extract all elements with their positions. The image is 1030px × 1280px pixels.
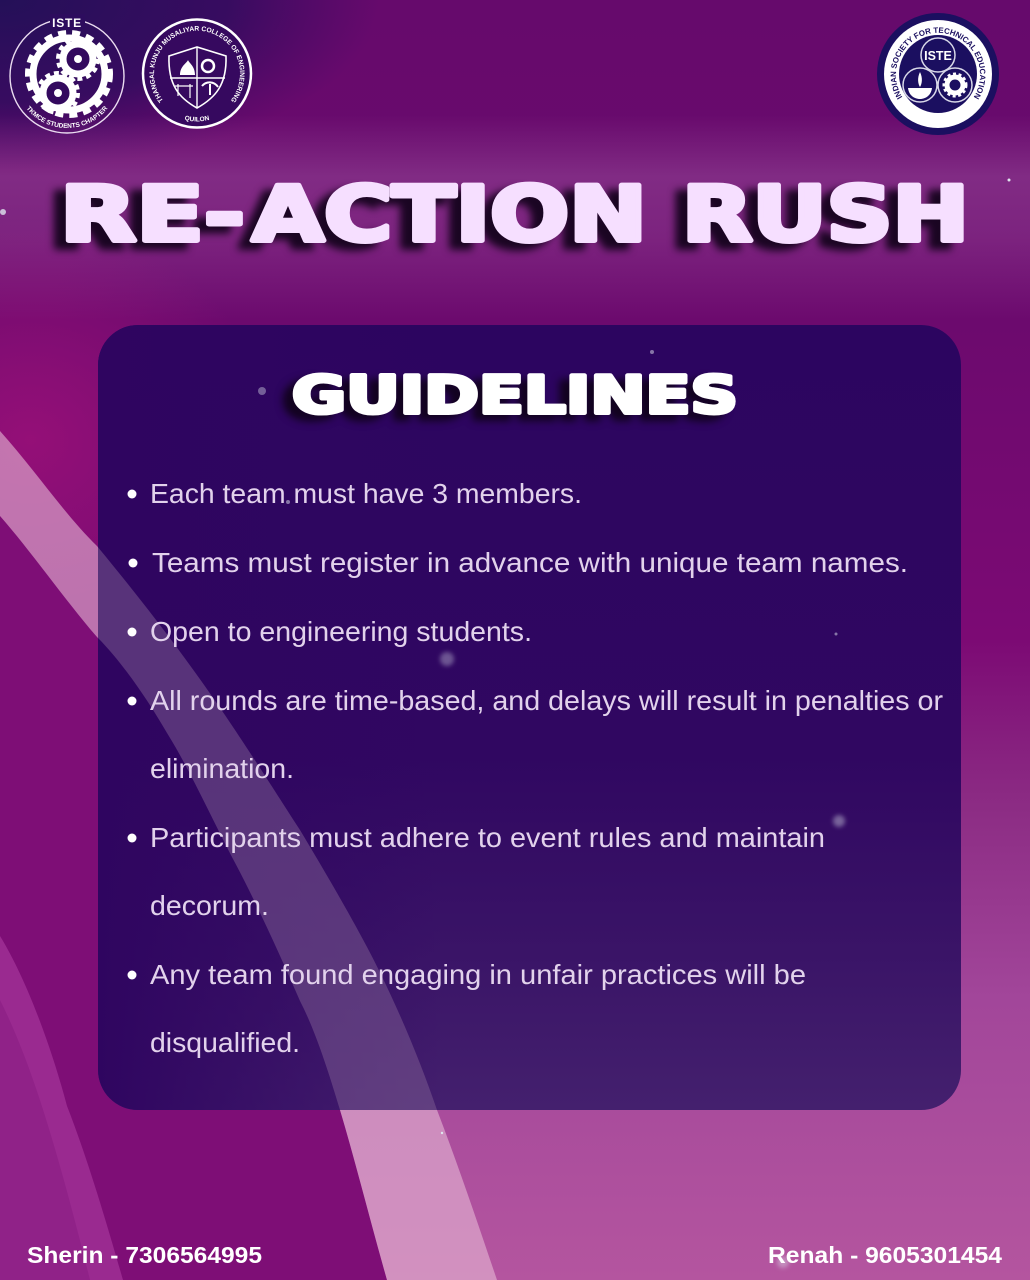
- guideline list: Each team must have 3 members.: [150, 478, 582, 509]
- logo: ISTE students chapter: [9, 16, 125, 134]
- logo: Indian Society for Technical Education: ISTE: [924, 49, 952, 63]
- guideline list: Any team found engaging in unfair practices will be: [150, 959, 806, 990]
- logo: ISTE students chapter: ISTE: [52, 16, 82, 30]
- guideline list: [128, 478, 943, 1058]
- logo: TKM college of engineering: [142, 18, 252, 129]
- guideline list: All rounds are time-based, and delays will result in penalties or: [150, 685, 943, 716]
- guideline list: elimination.: [150, 753, 294, 784]
- title: RUSH: [682, 170, 969, 258]
- guideline list: Open to engineering students.: [150, 616, 532, 647]
- logo: Indian Society for Technical Education: [877, 13, 999, 135]
- title: RE-: [60, 170, 245, 258]
- footer contact: Sherin: Sherin - 7306564995: [27, 1242, 262, 1268]
- logo: TKM college of engineering: THANGAL KUNJU MUSALIYAR COLLEGE OF ENGINEERING: [149, 26, 245, 104]
- footer contact: Renah: Renah - 9605301454: [768, 1242, 1002, 1268]
- logo: TKM college of engineering: QUILON: [185, 116, 210, 122]
- guideline list: Participants must adhere to event rules and maintain: [150, 822, 825, 853]
- panel heading: GUIDELINES: [292, 366, 738, 426]
- guideline list: disqualified.: [150, 1027, 300, 1058]
- guideline list: decorum.: [150, 890, 269, 921]
- logo: ISTE students chapter: TKMCE STUDENTS CHAPTER: [27, 106, 108, 128]
- panel: guidelines: [98, 325, 961, 1110]
- title: ACTION: [252, 170, 647, 258]
- guideline list: Teams must register in advance with unique team names.: [152, 547, 908, 578]
- logo: Indian Society for Technical Education: INDIAN SOCIETY FOR TECHNICAL EDUCATION: [890, 27, 986, 100]
- title: [60, 170, 969, 258]
